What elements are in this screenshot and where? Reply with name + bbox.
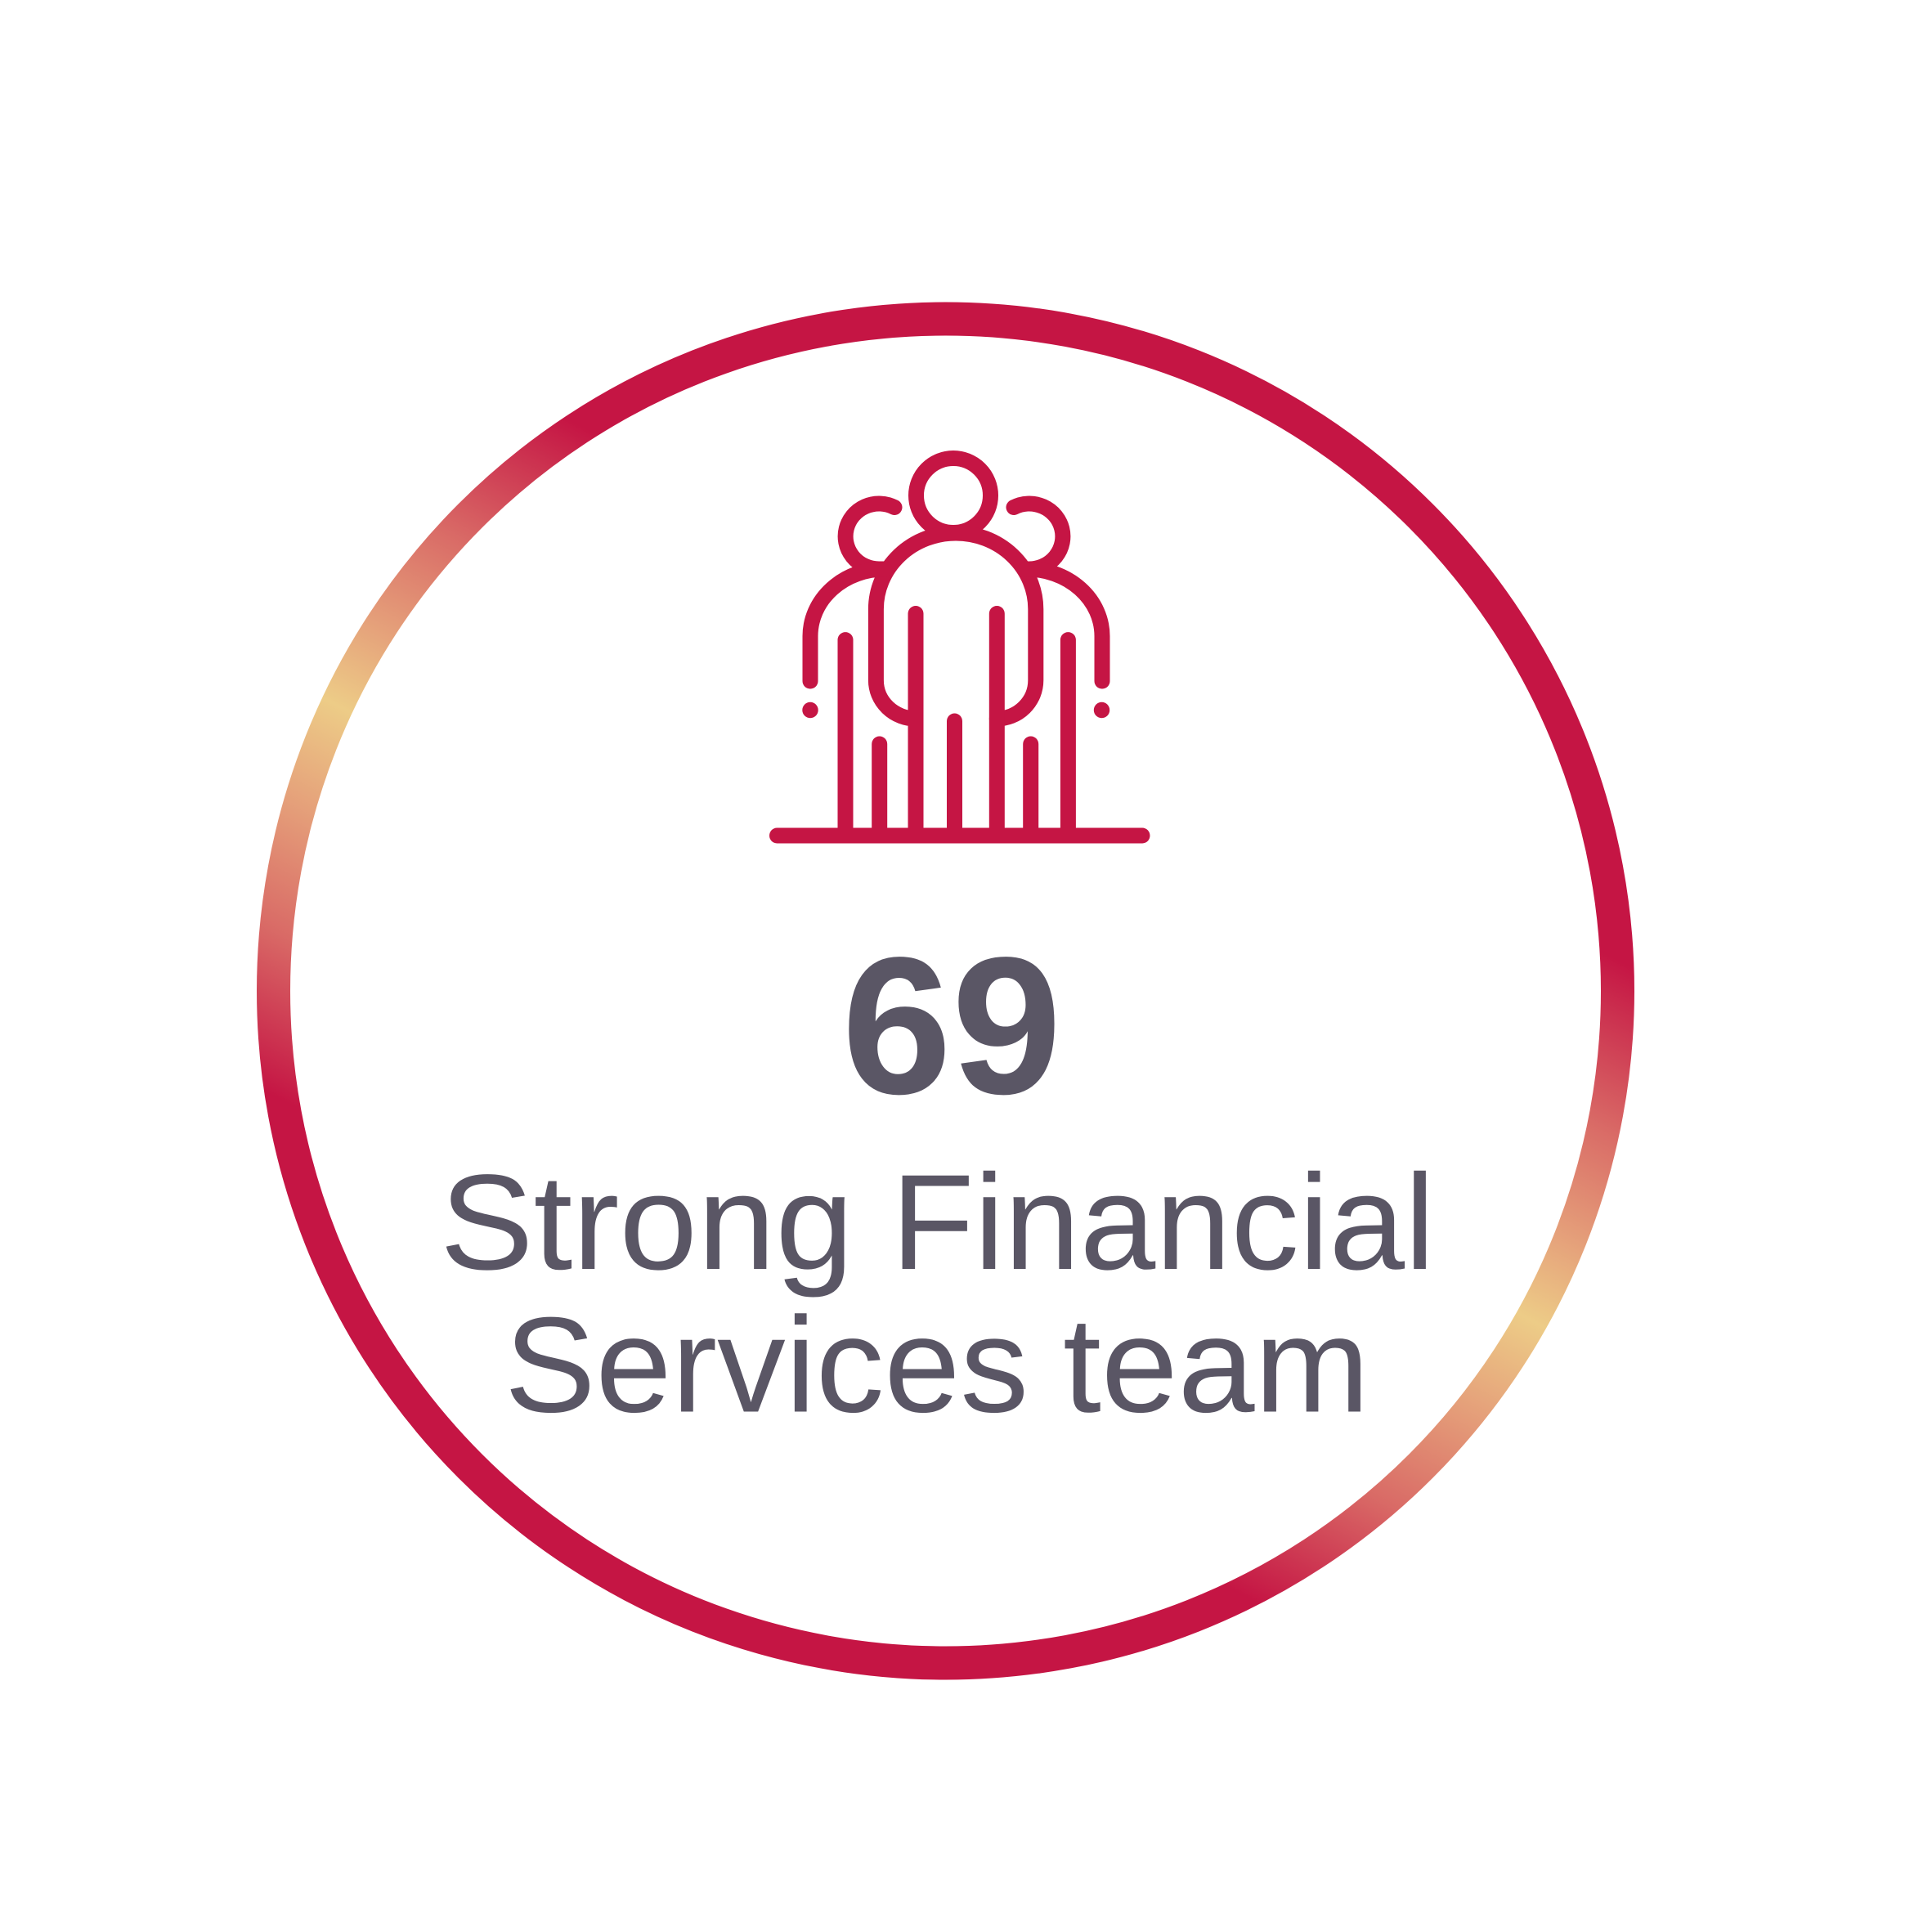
- headline number: 69: [842, 917, 1061, 1135]
- icon: centre person body: [876, 533, 1036, 719]
- icon: left person arm: [810, 569, 885, 681]
- label line 1 word: Strong: Strong: [440, 1147, 854, 1298]
- icon: vertical body lines: [845, 613, 1068, 836]
- label line 1 word: Financial: Financial: [891, 1147, 1435, 1298]
- icon: centre person head: [916, 458, 991, 533]
- gradient ring: [273, 319, 1617, 1663]
- icon: right person arm: [1027, 569, 1102, 681]
- label text: [440, 1147, 1435, 1441]
- icon: left dot: [802, 702, 818, 718]
- label line 2 word: team: team: [1063, 1290, 1369, 1441]
- icon: left person head: [845, 504, 894, 569]
- label line 2 word: Services: Services: [504, 1290, 1029, 1441]
- icon: ground line: [777, 827, 1142, 844]
- icon: right person head: [1014, 504, 1063, 569]
- icon: group of three people: [777, 458, 1142, 836]
- icon: right dot: [1094, 702, 1109, 718]
